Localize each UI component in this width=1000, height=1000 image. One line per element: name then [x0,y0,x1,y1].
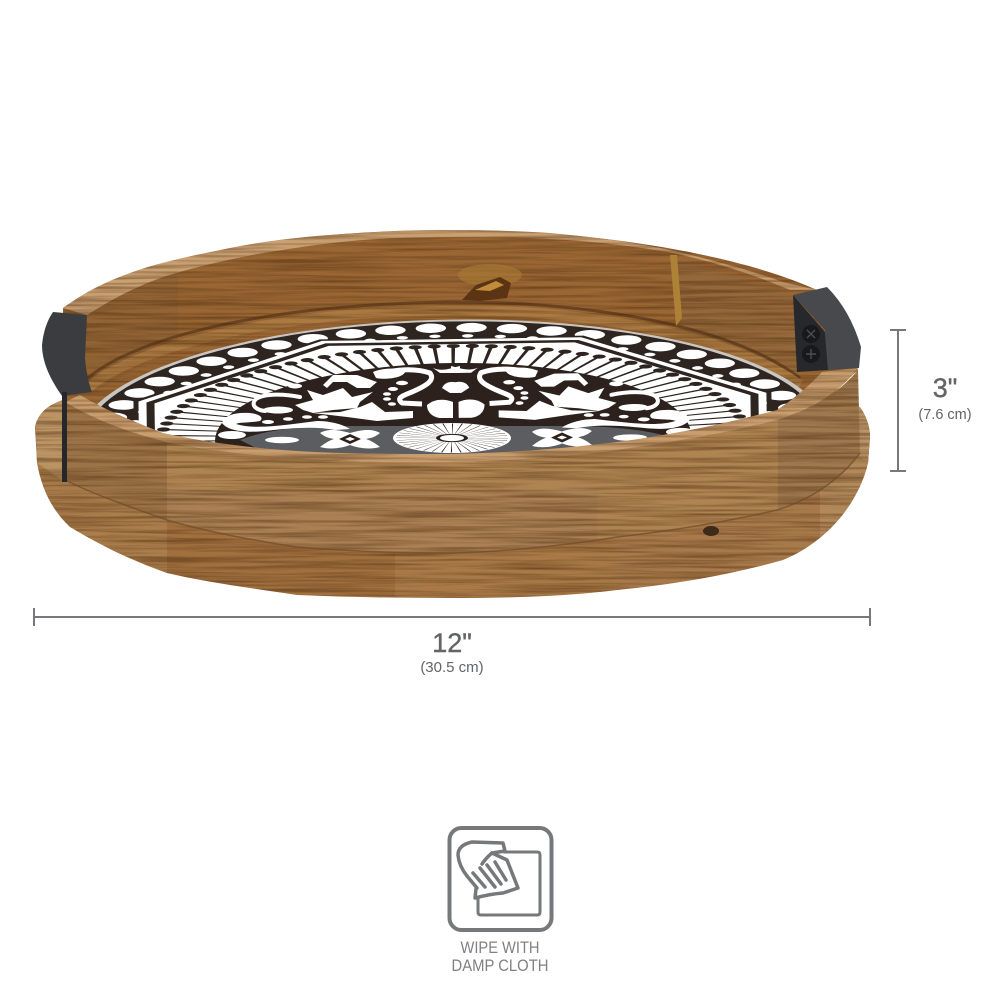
white octagon line [138,337,767,436]
centre flower [393,423,511,453]
plate edge and dark ground [88,320,816,430]
height label: (7.6 cm) [918,407,972,423]
height label: 3" [933,373,957,403]
tray base plate [30,395,880,605]
white scallops [98,322,808,422]
icon: wipe with damp cloth [450,828,552,930]
radial rays [157,344,748,450]
filigree ornament left [218,366,460,448]
width label [420,628,484,676]
grey reflection on lower band [240,426,672,455]
front wall of tray [67,370,860,552]
right metal handle [793,287,861,372]
icon caption: DAMP CLOTH [452,957,548,975]
dark inner field [215,363,691,462]
height label [918,373,972,423]
knot and yellow seam in back wall [458,255,682,326]
white ray field [154,342,751,462]
seam between wall and base [65,453,860,553]
left metal handle [42,312,92,482]
width label: 12" [432,628,472,658]
knot in lower wood [703,526,719,536]
front rim [65,368,858,462]
tray photograph [30,230,880,605]
back wall of tray [63,230,858,480]
height dimension line [890,329,906,472]
filigree ornament right [451,363,694,448]
width dimension line [33,608,871,626]
mandala plate [88,320,816,462]
icon caption [452,939,548,975]
octagon frame [133,336,772,408]
back rim [63,230,817,315]
screws [802,325,820,363]
width label: (30.5 cm) [420,659,484,676]
outer band dots [128,334,773,433]
icon caption: WIPE WITH [460,939,540,957]
